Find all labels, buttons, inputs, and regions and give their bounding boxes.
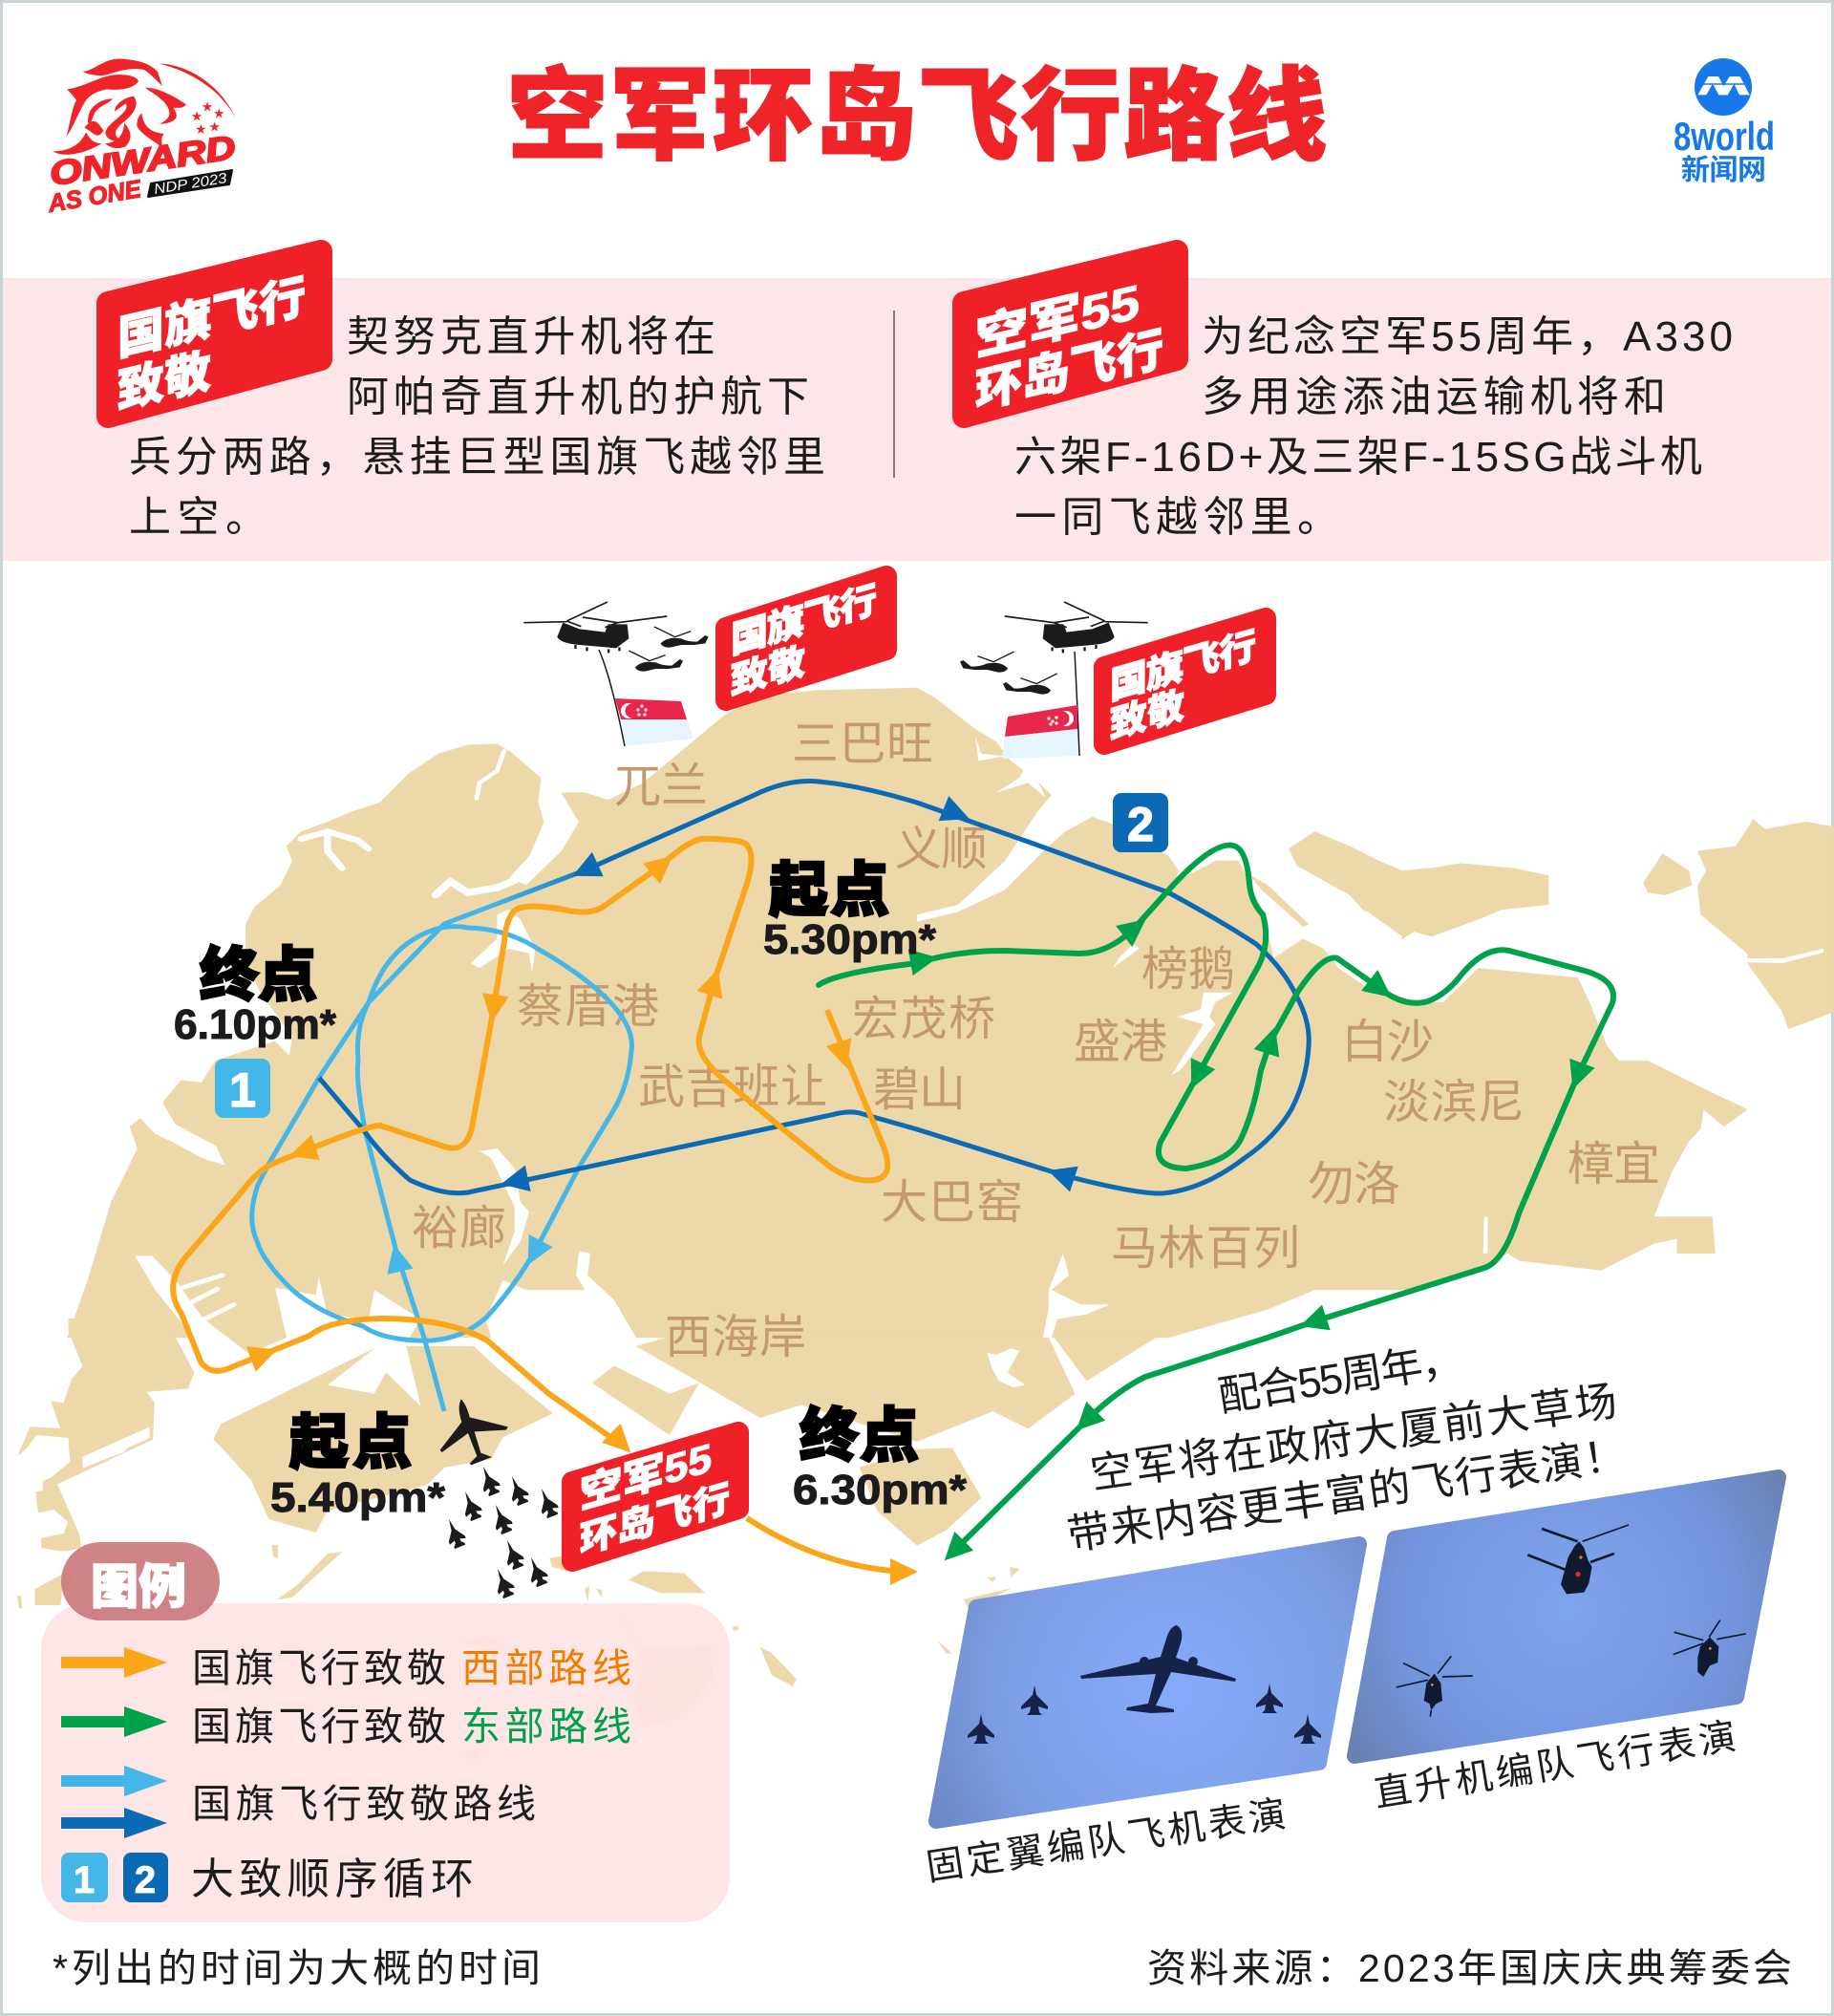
map place names: 淡滨尼 [1383,1077,1525,1128]
legend title pill [61,1542,220,1620]
tag: RSAF55 flypast on map [572,1432,738,1562]
label: end 1 [174,943,337,1048]
callout: anniversary note: 空军将在政府大厦前大草场 [1088,1378,1620,1498]
tag: RSAF55 island flypast: 空军55 [975,274,1140,366]
tag: flag flypast: 致敬 [117,344,211,418]
caption: helicopter: 直升机编队飞行表演 [1372,1716,1739,1815]
note: approximate time: *列出的时间为大概的时间 [53,1946,541,1990]
legend text: order: 大致顺序循环 [191,1855,474,1903]
panel: legend [41,1542,730,1922]
logo: NDP 2023 Onward As One: AS ONE [45,174,143,218]
text: RSAF55 description: 多用途添油运输机将和 [1202,374,1666,420]
label: start 1: 起点 [769,858,889,924]
map place names: 武吉班让 [638,1062,827,1113]
map place names: 大巴窑 [881,1177,1023,1229]
callout: anniversary note [1064,1336,1629,1559]
legend badges: 1 [74,1859,95,1901]
map place names: 马林百列 [1111,1223,1300,1275]
legend arrow: green [61,1706,167,1737]
tag: flag flypast west: 致敬 [731,640,805,703]
photo: helicopter formation [1354,1477,1779,1756]
tag: RSAF55 flypast on map: 环岛飞行 [580,1478,730,1562]
tag: flag flypast east: 致敬 [1110,684,1184,747]
map place names: 裕廊 [412,1203,506,1255]
map place names: 白沙 [1341,1017,1434,1068]
logo: NDP 2023 Onward As One: ★ [191,112,203,123]
label: start 2 [270,1410,446,1521]
legend text: east route: 国旗飞行致敬 [192,1705,446,1748]
label: start 2: 5.40pm* [270,1474,446,1521]
source: 资料来源：2023年国庆庆典筹委会 [1147,1946,1792,1990]
label: end 2 [793,1404,968,1513]
tag: flag flypast west [726,576,886,703]
map place names: 勿洛 [1308,1159,1400,1211]
route: green east [819,846,1613,1570]
logo: NDP 2023 Onward As One: NDP 2023 [153,170,228,198]
map place names [412,718,1660,1363]
text: RSAF55 description: 为纪念空军55周年，A330 [1202,313,1733,360]
label: end 2: 6.30pm* [793,1467,968,1513]
legend text: west route: 西部路线 [461,1646,631,1690]
tag: RSAF55 island flypast [964,251,1177,418]
logo: NDP 2023 Onward As One: ONWARD [47,129,238,193]
route: orange west [173,839,918,1585]
legend title pill: 图例 [91,1560,186,1614]
badge: 1 [215,1059,270,1118]
text: RSAF55 description: 一同飞越邻里。 [1014,494,1339,541]
map place names: 兀兰 [614,761,708,812]
panel: intro band [3,251,1831,561]
caption: fixed-wing: 固定翼编队飞机表演 [924,1794,1289,1889]
callout: anniversary note: 配合55周年， [1215,1336,1465,1421]
logo: NDP 2023 Onward As One: ★ [202,102,213,114]
text: RSAF55 description: 六架F-16D+及三架F-15SG战斗机 [1014,434,1702,481]
map place names: 榜鹅 [1141,944,1235,996]
label: start 2: 起点 [289,1410,412,1476]
label: end 2: 终点 [800,1404,919,1469]
legend text: east route: 东部路线 [461,1705,631,1748]
tag: flag flypast east [1104,618,1266,747]
badge: 2: 2 [1127,798,1154,851]
tag: flag flypast: 国旗飞行 [117,269,306,366]
logo: NDP 2023 Onward As One: ★ [209,122,220,134]
tag: RSAF55 island flypast: 环岛飞行 [975,322,1163,418]
legend text: east route [192,1705,631,1748]
tag: RSAF55 flypast on map: 空军55 [580,1435,712,1518]
icon: airliner and fighter formation [440,1399,561,1599]
tag: flag flypast east: 国旗飞行 [1110,625,1256,708]
badge: 2 [1113,793,1168,852]
icon: west helicopters with flag [523,602,709,746]
title: 空军环岛飞行路线 [507,61,1327,173]
label: start 1 [763,858,937,963]
legend text: west route: 国旗飞行致敬 [192,1646,446,1690]
map place names: 义顺 [895,824,988,875]
badge: 1: 1 [229,1063,256,1117]
label: end 1: 6.10pm* [174,1001,337,1048]
logo: 8world news: 新闻网 [1681,155,1766,186]
logo: NDP 2023 Onward As One: ★ [196,124,206,136]
logo: 8world news [1674,58,1775,186]
text: flag flypast description: 契努克直升机将在 [347,313,715,360]
legend arrow: light blue [61,1766,167,1796]
legend arrow: orange [61,1647,167,1678]
logo: NDP 2023 Onward As One: ★ [214,108,224,119]
logo: 8world news: 8world [1674,114,1775,159]
photo: fixed-wing formation [936,1544,1359,1821]
text: flag flypast description: 阿帕奇直升机的护航下 [347,374,809,420]
legend arrow: dark blue [61,1808,167,1838]
map place names: 碧山 [873,1064,966,1116]
callout: anniversary note: 带来内容更丰富的飞行表演！ [1064,1431,1629,1559]
legend badges [61,1853,168,1902]
label: end 1: 终点 [200,943,317,1009]
map place names: 宏茂桥 [852,994,995,1045]
text: flag flypast description [129,313,825,541]
label: start 1: 5.30pm* [763,916,937,963]
map place names: 三巴旺 [792,718,933,770]
legend text: flypast route: 国旗飞行致敬路线 [192,1782,536,1826]
map: Singapore land [17,688,1834,1759]
legend badges: 2 [135,1859,156,1901]
map place names: 蔡厝港 [517,981,659,1033]
route: dark blue loop 2 [319,782,1309,1197]
map place names: 盛港 [1074,1017,1167,1068]
text: flag flypast description: 兵分两路，悬挂巨型国旗飞越邻里 [129,434,825,481]
tag: flag flypast [108,251,321,418]
icon: east helicopters with flag [960,602,1148,759]
legend text: west route [192,1646,631,1690]
map place names: 樟宜 [1567,1139,1660,1190]
map place names: 西海岸 [665,1312,806,1363]
route: light blue loop 1 [252,927,631,1411]
tag: flag flypast west: 国旗飞行 [731,579,877,662]
text: RSAF55 description [1014,313,1733,541]
text: flag flypast description: 上空。 [129,494,267,541]
logo: NDP 2023 Onward As One [45,59,238,218]
